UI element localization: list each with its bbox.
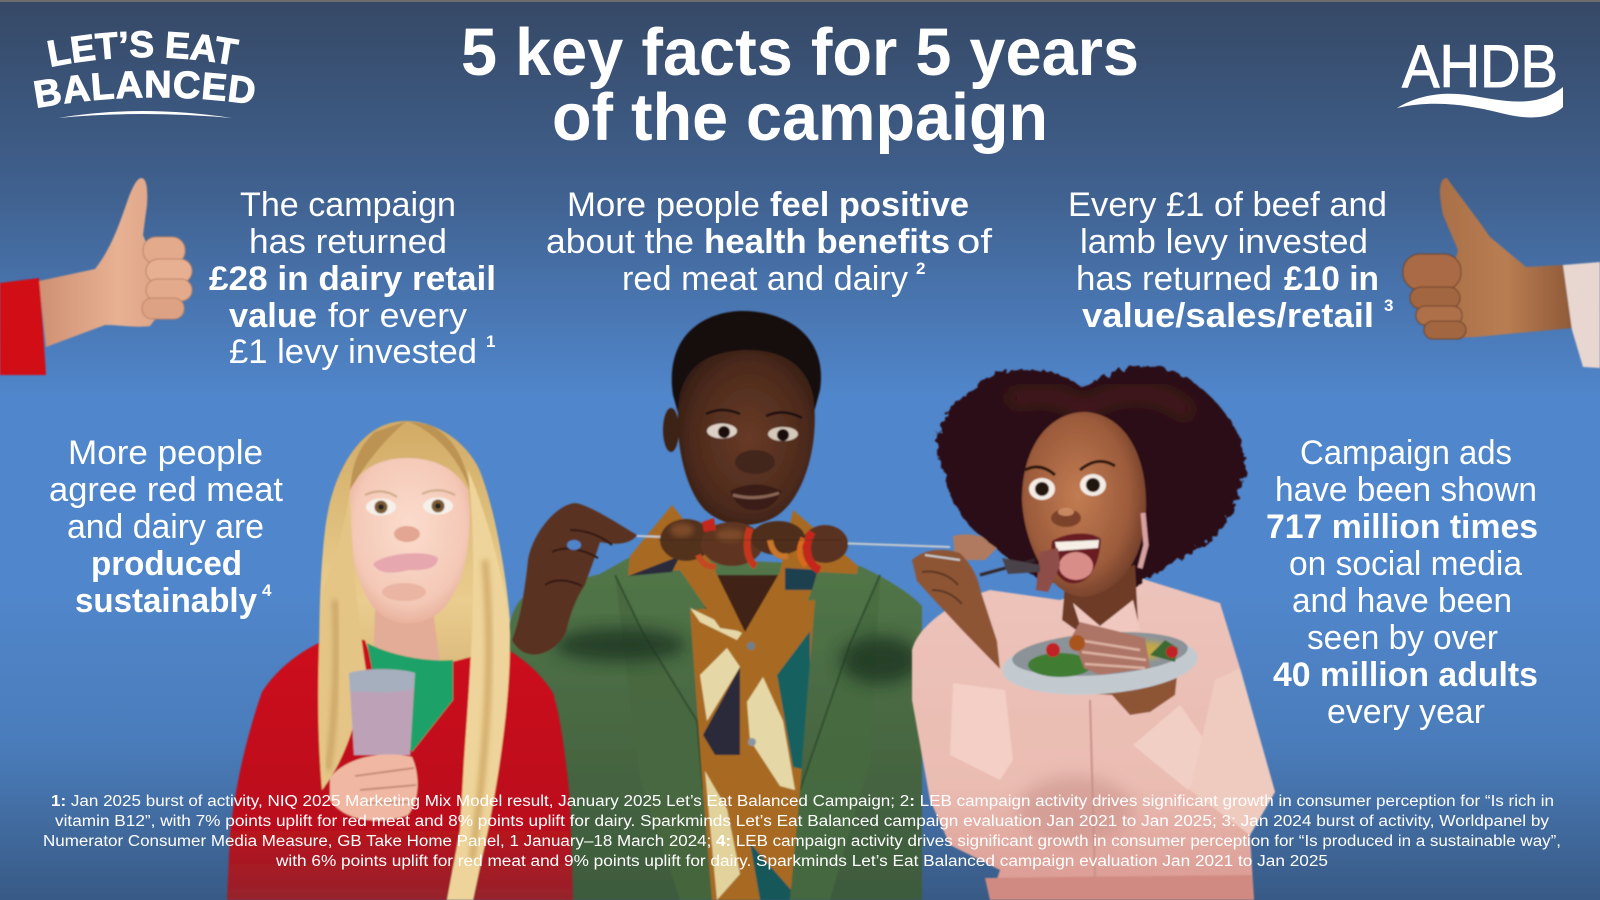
photo: girl with smoothie	[227, 421, 573, 900]
fact 1: £28 dairy retail value: has returned	[249, 223, 447, 261]
footnotes	[43, 793, 1561, 870]
logo: Let's Eat Balanced: LET’S EAT	[47, 30, 240, 67]
fact 4: produced sustainably: agree red meat	[49, 471, 283, 509]
fact 1: £28 dairy retail value: £1 levy invested	[229, 333, 477, 371]
fact 4: produced sustainably: produced	[91, 545, 242, 583]
fact 2: positive about health benefits	[546, 186, 992, 298]
fact 1: £28 dairy retail value: 1	[486, 332, 495, 351]
fact 4: produced sustainably: 4	[262, 581, 272, 600]
fact 2: positive about health benefits: 2	[916, 259, 925, 278]
fact 5: campaign ads reach: Campaign ads	[1300, 434, 1512, 472]
fact 4: produced sustainably: sustainably	[75, 582, 257, 620]
title: of the campaign	[552, 80, 1048, 155]
icon: right thumbs up with pale cuff	[1403, 178, 1600, 368]
fact 3: £10 return on beef and lamb levy	[1068, 186, 1393, 335]
fact 2: positive about health benefits: feel positive	[770, 186, 969, 224]
fact 5: campaign ads reach: have been shown	[1275, 471, 1537, 509]
fact 5: campaign ads reach	[1266, 434, 1538, 731]
fact 5: campaign ads reach: and have been	[1292, 582, 1512, 620]
fact 3: £10 return on beef and lamb levy: Every £1 of beef and	[1068, 186, 1387, 224]
fact 5: campaign ads reach: seen by over	[1307, 619, 1498, 657]
fact 5: campaign ads reach: 40 million adults	[1273, 656, 1538, 694]
photo: man with kebab	[506, 311, 950, 900]
footnotes: vitamin B12”, with 7% points uplift for red meat and 8% points uplift for dairy. Sparkminds Let’s Eat Balanced campaign evaluation Jan 2021 to Jan 2025; 3: Jan 2024 burst of activity, Worldpanel by	[55, 813, 1549, 830]
fact 1: £28 dairy retail value	[209, 186, 496, 371]
fact 1: £28 dairy retail value: value	[229, 297, 317, 335]
fact 4: produced sustainably: More people	[68, 434, 263, 472]
footnotes: 1: Jan 2025 burst of activity, NIQ 2025 Marketing Mix Model result, January 2025 Let’s Eat Balanced Campaign; 2 : LEB campaign activity drives significant growth in consumer perception for “Is rich in	[51, 793, 1554, 810]
title: 5 key facts for 5 years	[461, 15, 1139, 90]
footnotes: with 6% points uplift for red meat and 9% points uplift for dairy. Sparkminds Let’s Eat Balanced campaign evaluation Jan 2021 to Jan 2025	[275, 853, 1328, 870]
fact 5: campaign ads reach: on social media	[1289, 545, 1523, 583]
fact 2: positive about health benefits: of	[957, 223, 992, 261]
icon: left thumbs up with red sleeve	[0, 178, 192, 375]
fact 3: £10 return on beef and lamb levy: £10 in	[1284, 260, 1379, 298]
fact 5: campaign ads reach: every year	[1327, 693, 1485, 731]
fact 5: campaign ads reach: 717 million times	[1266, 508, 1538, 546]
fact 3: £10 return on beef and lamb levy: lamb levy invested	[1080, 223, 1368, 261]
fact 3: £10 return on beef and lamb levy: has returned	[1076, 260, 1272, 298]
footnotes: Numerator Consumer Media Measure, GB Take Home Panel, 1 January–18 March 2024; 4: LEB campaign activity drives significant growth in consumer perception for “Is produced in a sustainable way”,	[43, 833, 1561, 850]
logo: Let's Eat Balanced	[34, 30, 255, 118]
fact 3: £10 return on beef and lamb levy: value/sales/retail	[1082, 297, 1374, 335]
fact 4: produced sustainably	[49, 434, 283, 620]
logo: AHDB: AHDB	[1402, 33, 1558, 100]
photo: woman with fork and plate	[912, 367, 1275, 900]
fact 2: positive about health benefits: about the	[546, 223, 694, 261]
fact 1: £28 dairy retail value: for every	[328, 297, 468, 335]
fact 2: positive about health benefits: health benefits	[704, 223, 950, 261]
logo: Let's Eat Balanced: BALANCED	[34, 70, 255, 108]
title	[461, 15, 1139, 155]
fact 1: £28 dairy retail value: £28 in dairy retail	[209, 260, 496, 298]
fact 4: produced sustainably: and dairy are	[67, 508, 264, 546]
fact 2: positive about health benefits: More people	[567, 186, 760, 224]
fact 3: £10 return on beef and lamb levy: 3	[1384, 296, 1393, 315]
fact 1: £28 dairy retail value: The campaign	[240, 186, 456, 224]
fact 2: positive about health benefits: red meat and dairy	[622, 260, 909, 298]
